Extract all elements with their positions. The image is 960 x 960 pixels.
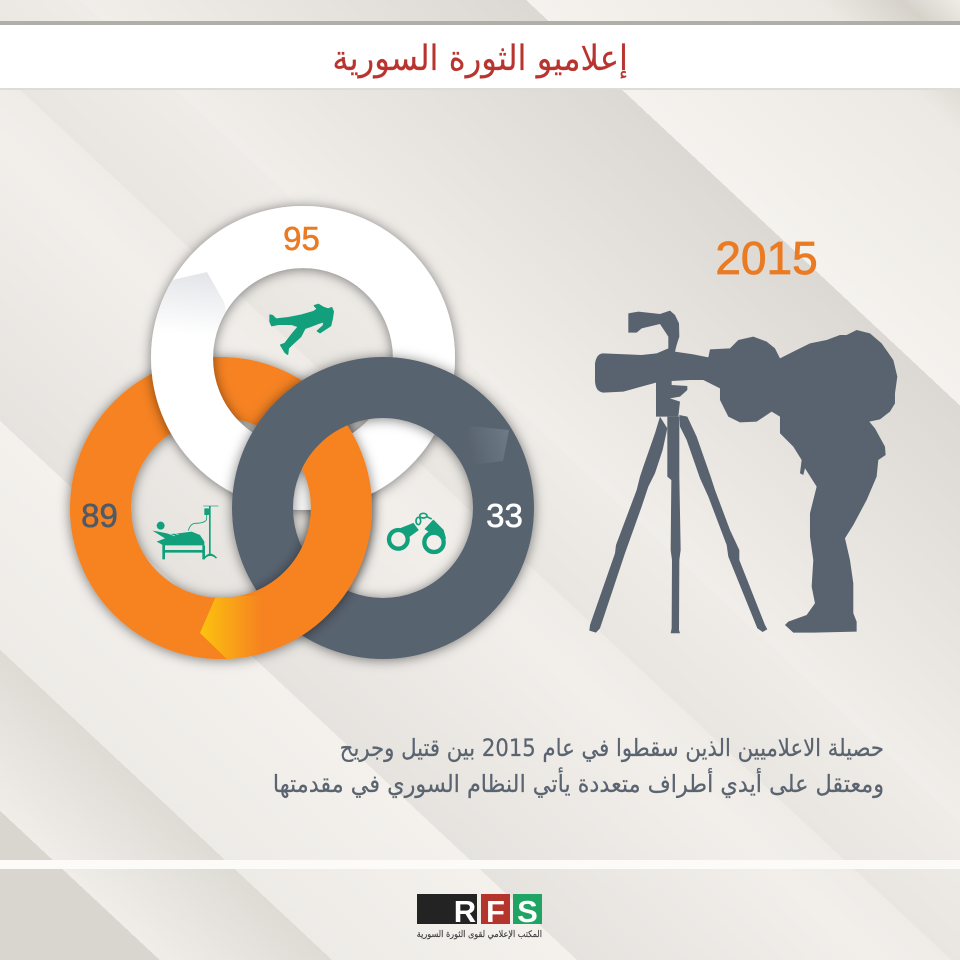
number: detained: 33 (486, 497, 523, 534)
year: 2015 (715, 232, 818, 284)
tripod right leg (679, 415, 767, 632)
icon: hospital bed (152, 506, 218, 559)
description text: ومعتقل على أيدي أطراف متعددة يأتي النظام السوري في مقدمتها (273, 767, 884, 798)
description text (273, 735, 884, 798)
logo: RFS (417, 894, 542, 940)
photographer (595, 311, 897, 633)
number: killed: 95 (283, 220, 320, 257)
number: injured: 89 (81, 497, 118, 534)
title: إعلاميو الثورة السورية (332, 38, 628, 79)
title bar (0, 21, 960, 90)
ring: detained (slate) (262, 388, 509, 628)
tripod centre leg (667, 417, 681, 633)
ring: orange overlap in front (100, 388, 342, 628)
icon: handcuffs (389, 513, 446, 552)
icon: fallen person (270, 304, 333, 354)
tripod left leg (589, 417, 667, 633)
logo: RFS: S (517, 894, 538, 929)
ring chart: three linked rings (81, 220, 523, 628)
logo caption: المكتب الإعلامي لقوى الثورة السورية (417, 930, 542, 940)
logo: RFS: F (486, 894, 505, 929)
description text: حصيلة الاعلاميين الذين سقطوا في عام 2015 بين قتيل وجريح (340, 735, 884, 762)
ring: injured (orange) (100, 388, 342, 628)
logo: RFS: R (454, 894, 476, 929)
photographer silhouette with tripod (589, 311, 897, 633)
footer divider band (0, 860, 960, 869)
ring: killed (white) (182, 237, 424, 479)
